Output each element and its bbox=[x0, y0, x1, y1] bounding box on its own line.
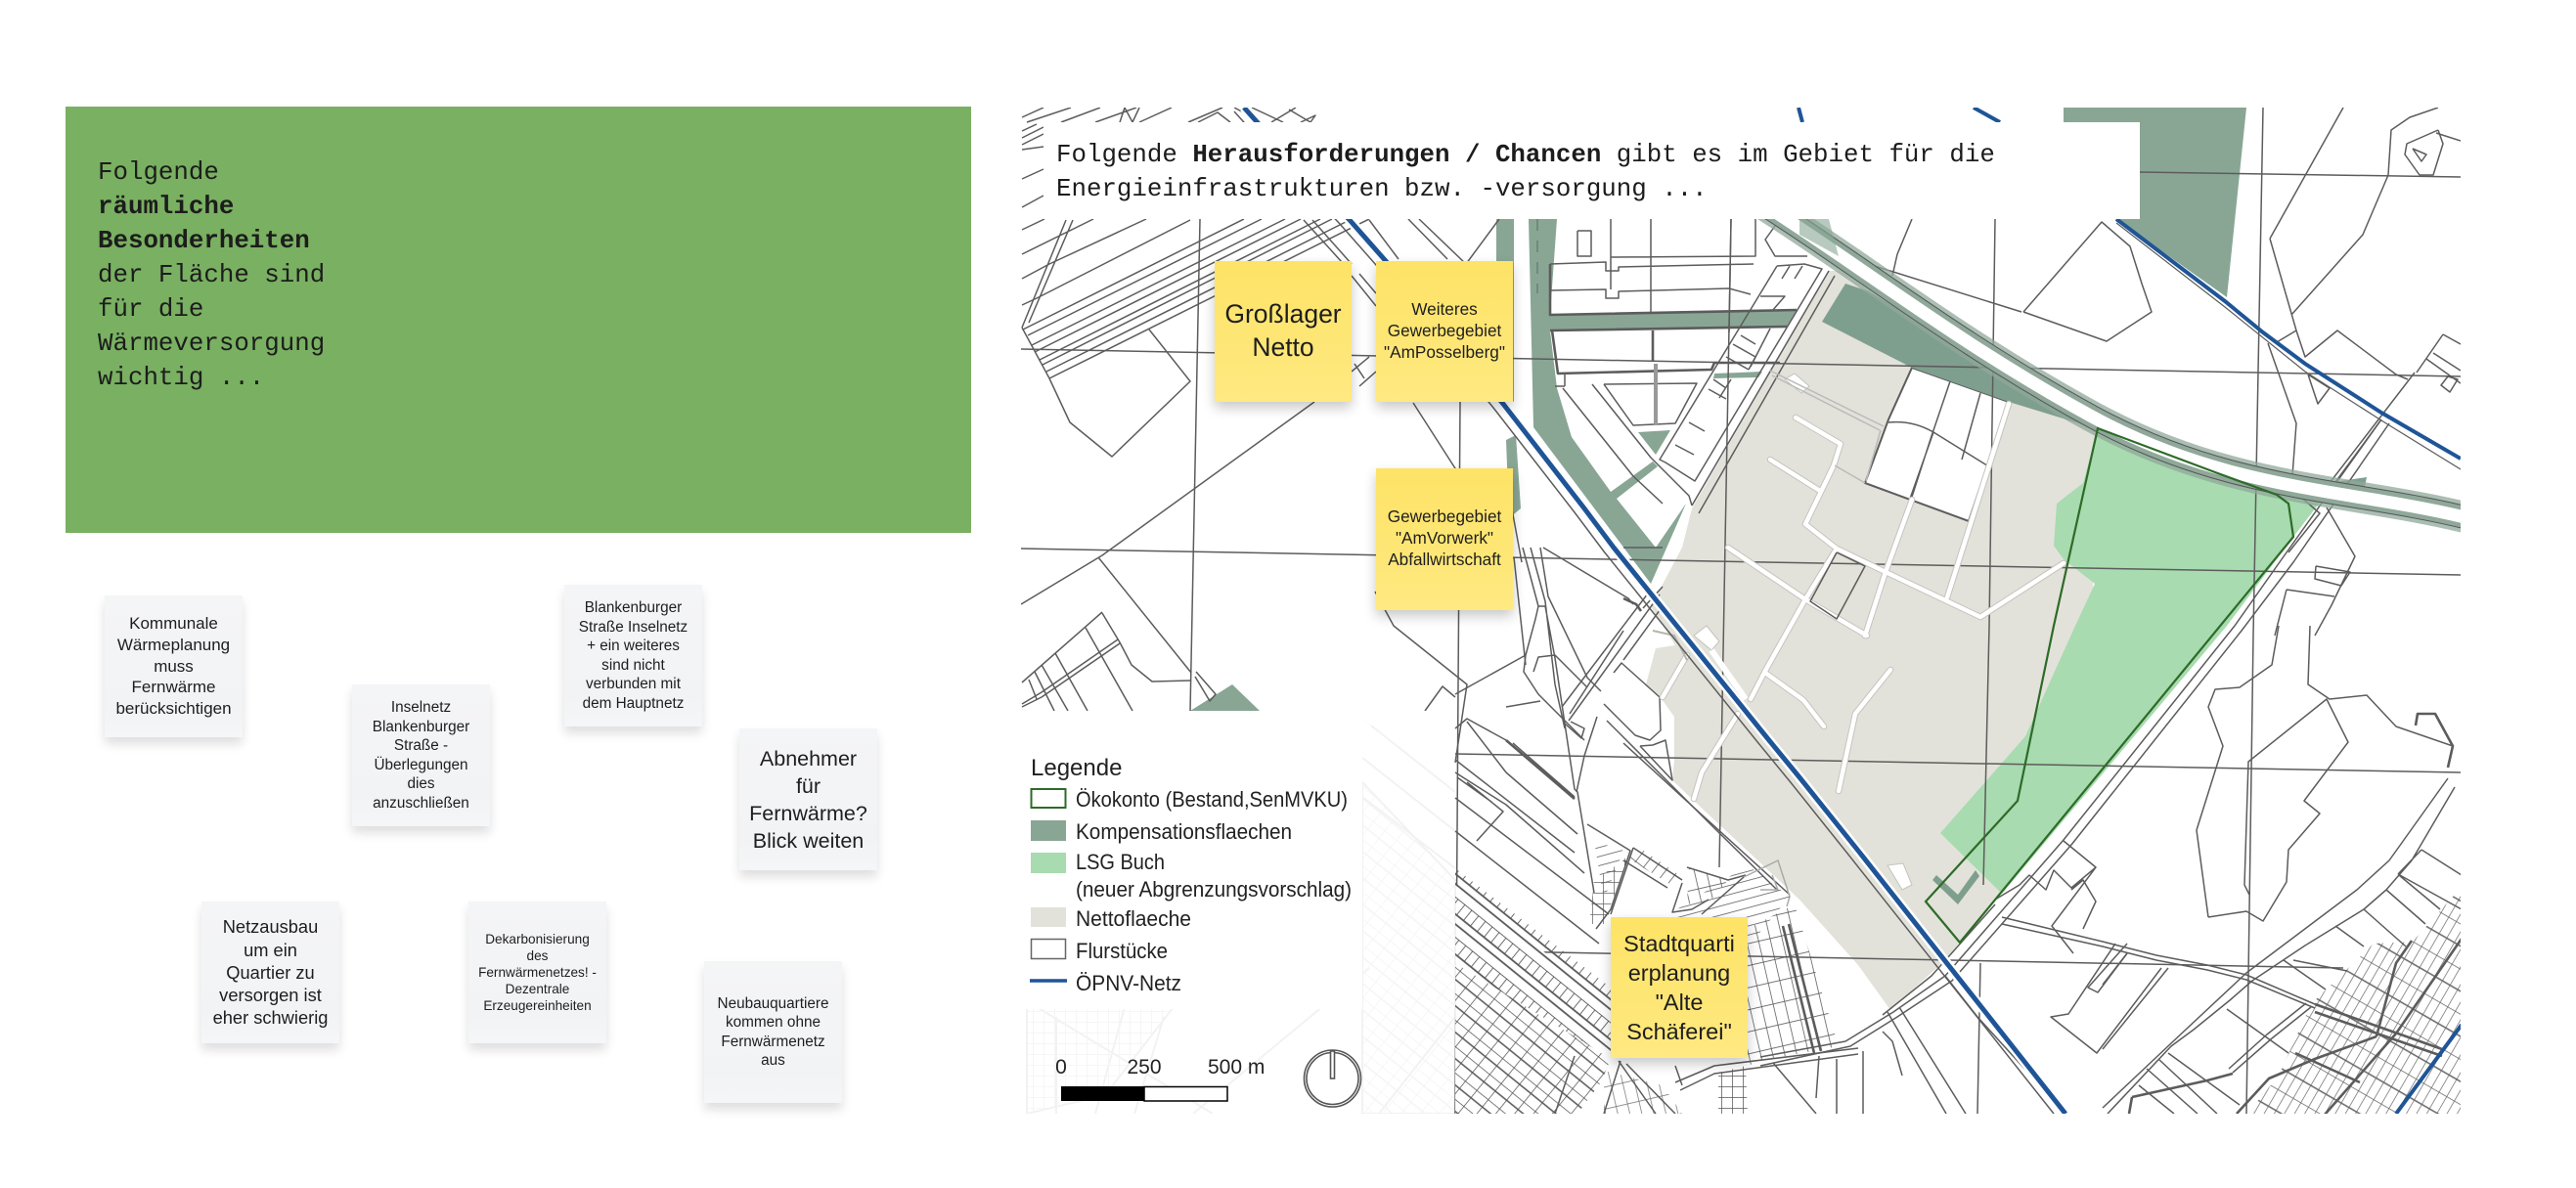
scale bar: 0 bbox=[1055, 1056, 1067, 1078]
note card: Kommunale Wärmeplanung bbox=[105, 595, 243, 737]
sticky note: Stadtquartierplanung: Stadtquarti bbox=[1623, 931, 1735, 956]
sticky note: Großlager Netto bbox=[1215, 261, 1352, 402]
panel heading text: Wärmeversorgung bbox=[98, 330, 325, 358]
map: Kompensationsflaechen bbox=[1191, 108, 2367, 904]
panel heading text: für die bbox=[98, 295, 203, 324]
map panel bbox=[1021, 108, 2461, 1114]
note card: Inselnetz Blankenburger Straße: Überlegungen bbox=[374, 757, 468, 772]
sticky note: Stadtquartierplanung: erplanung bbox=[1628, 960, 1730, 986]
note card: Dekarbonisierung: Dezentrale bbox=[506, 982, 569, 996]
note card: Inselnetz Blankenburger Straße: Inselnetz bbox=[391, 699, 451, 716]
note card: Dekarbonisierung: Fernwärmenetzes! - bbox=[478, 965, 597, 980]
sticky note: Gewerbegebiet AmVorwerk: Gewerbegebiet bbox=[1388, 506, 1501, 526]
panel heading text: räumliche bbox=[98, 193, 234, 221]
scale bar bbox=[1055, 1056, 1265, 1101]
note card: Kommunale Wärmeplanung: muss bbox=[154, 657, 194, 676]
map: Ökokonto outline bbox=[1926, 428, 2293, 943]
map title text: Folgende Herausforderungen / Chancen gibt es im Gebiet für die bbox=[1056, 141, 1995, 169]
panel heading text: wichtig ... bbox=[98, 364, 264, 392]
map title box bbox=[1044, 122, 2140, 219]
sticky note: Weiteres Gewerbegebiet: Gewerbegebiet bbox=[1388, 321, 1501, 340]
note card: Blankenburger Straße Inselnetz: dem Hauptnetz bbox=[583, 694, 684, 712]
map: white road network bbox=[1653, 371, 2064, 890]
scale bar: 250 bbox=[1127, 1056, 1162, 1078]
note card: Dekarbonisierung: Erzeugereinheiten bbox=[483, 998, 592, 1013]
note card: Abnehmer für Fernwärme: Abnehmer bbox=[760, 747, 857, 770]
map: Nettoflaeche area bbox=[1646, 271, 2098, 1010]
note card: Neubauquartiere: kommen ohne bbox=[726, 1014, 821, 1031]
note card: Blankenburger Straße Inselnetz: Straße Inselnetz bbox=[579, 618, 688, 636]
note card: Kommunale Wärmeplanung: Fernwärme bbox=[132, 678, 215, 696]
map title text: Energieinfrastrukturen bzw. -versorgung ... bbox=[1056, 175, 1708, 203]
sticky note: Weiteres Gewerbegebiet bbox=[1376, 261, 1513, 402]
legend item: Nettoflaeche: Nettoflaeche bbox=[1076, 906, 1191, 931]
note card: Blankenburger Straße Inselnetz: sind nicht bbox=[601, 657, 665, 673]
note card: Kommunale Wärmeplanung: berücksichtigen bbox=[115, 699, 232, 718]
sticky note: Weiteres Gewerbegebiet: "AmPosselberg" bbox=[1384, 342, 1505, 362]
legend heading: Legende bbox=[1031, 755, 1122, 781]
legend item: LSG Buch bbox=[1031, 850, 1352, 902]
sticky note: Stadtquartierplanung: Schäferei" bbox=[1626, 1019, 1732, 1044]
note card: Netzausbau: eher schwierig bbox=[213, 1007, 328, 1028]
sticky note: Großlager Netto: Großlager bbox=[1224, 299, 1342, 329]
scale bar: 500 m bbox=[1208, 1056, 1265, 1078]
sticky note: Gewerbegebiet AmVorwerk bbox=[1376, 468, 1513, 610]
note card: Inselnetz Blankenburger Straße: dies bbox=[407, 775, 435, 792]
map: north-east parcels bbox=[1865, 108, 2461, 636]
panel heading text: Folgende bbox=[98, 158, 219, 187]
legend bbox=[1021, 726, 1362, 1107]
sticky note: Gewerbegebiet AmVorwerk: Abfallwirtschaft bbox=[1388, 550, 1501, 569]
note card: Inselnetz Blankenburger Straße: Blankenburger bbox=[373, 718, 469, 735]
note card: Netzausbau: um ein bbox=[244, 940, 297, 960]
map: rail corridor bbox=[1760, 202, 2465, 517]
note card: Blankenburger Straße Inselnetz: Blankenburger bbox=[585, 599, 682, 616]
note card: Blankenburger Straße Inselnetz: + ein weiteres bbox=[587, 638, 680, 654]
note card: Blankenburger Straße Inselnetz bbox=[564, 585, 702, 726]
note card: Neubauquartiere bbox=[704, 961, 842, 1103]
map: Flurstücke white block bbox=[1865, 368, 2009, 521]
legend item: Nettoflaeche bbox=[1031, 906, 1191, 931]
map: dense parcels bbox=[1455, 841, 2462, 1115]
map: interchange and road parcels bbox=[1455, 548, 1790, 944]
legend item: LSG Buch: LSG Buch bbox=[1076, 850, 1165, 874]
note card: Abnehmer für Fernwärme: Blick weiten bbox=[753, 829, 864, 853]
sticky note: Großlager Netto: Netto bbox=[1252, 332, 1314, 362]
note card: Kommunale Wärmeplanung: Wärmeplanung bbox=[117, 636, 230, 654]
note card: Abnehmer für Fernwärme: Fernwärme? bbox=[749, 802, 867, 825]
map: LSG Buch area bbox=[1940, 428, 2323, 894]
icon: north arrow bbox=[1305, 1050, 1361, 1107]
note card: Neubauquartiere: Neubauquartiere bbox=[718, 995, 828, 1011]
sticky note: Gewerbegebiet AmVorwerk: "AmVorwerk" bbox=[1396, 528, 1493, 548]
note card: Netzausbau bbox=[201, 902, 339, 1043]
legend item: Flurstücke: Flurstücke bbox=[1076, 939, 1168, 963]
sticky note: Stadtquartierplanung bbox=[1611, 917, 1748, 1058]
note card: Netzausbau: Quartier zu bbox=[226, 962, 315, 983]
note card: Kommunale Wärmeplanung: Kommunale bbox=[129, 614, 218, 633]
note card: Dekarbonisierung bbox=[468, 902, 606, 1043]
note card: Abnehmer für Fernwärme: für bbox=[796, 774, 821, 798]
map: upper industrial parcels bbox=[1550, 217, 1835, 513]
panel heading text bbox=[98, 158, 325, 392]
map: south-east parcels bbox=[1760, 419, 2462, 1115]
legend backdrop bbox=[1021, 711, 1455, 1114]
note card: Dekarbonisierung: Dekarbonisierung bbox=[485, 932, 590, 946]
legend item: ÖPNV-Netz: ÖPNV-Netz bbox=[1076, 971, 1181, 995]
note card: Abnehmer für Fernwärme bbox=[739, 728, 877, 870]
panel heading text: der Fläche sind bbox=[98, 261, 325, 289]
panel heading text: Besonderheiten bbox=[98, 227, 310, 255]
sticky note: Stadtquartierplanung: "Alte bbox=[1656, 990, 1703, 1015]
note card: Netzausbau: Netzausbau bbox=[223, 916, 318, 937]
note card: Dekarbonisierung: des bbox=[527, 948, 548, 963]
sticky note: Weiteres Gewerbegebiet: Weiteres bbox=[1411, 299, 1478, 319]
note card: Neubauquartiere: Fernwärmenetz bbox=[721, 1033, 825, 1050]
legend item: Flurstücke bbox=[1031, 939, 1168, 963]
note card: Neubauquartiere: aus bbox=[761, 1052, 785, 1069]
note card: Blankenburger Straße Inselnetz: verbunden mit bbox=[586, 676, 681, 692]
legend item: Ökokonto: Ökokonto (Bestand,SenMVKU) bbox=[1076, 787, 1348, 812]
map: ÖPNV lines bbox=[1234, 108, 2462, 1114]
map: top-left parallel parcels bbox=[1022, 108, 1447, 457]
map: long parcel lines bbox=[1021, 108, 2461, 1114]
map title text bbox=[1056, 141, 1995, 203]
note card: Inselnetz Blankenburger Straße: Straße - bbox=[394, 737, 448, 754]
legend item: Kompensationsflaechen: Kompensationsflaechen bbox=[1076, 819, 1292, 844]
note card: Inselnetz Blankenburger Straße bbox=[352, 684, 490, 826]
green panel: räumliche Besonderheiten bbox=[66, 107, 971, 533]
legend item: LSG Buch: (neuer Abgrenzungsvorschlag) bbox=[1076, 877, 1352, 902]
note card: Netzausbau: versorgen ist bbox=[219, 985, 322, 1005]
note card: Inselnetz Blankenburger Straße: anzuschließen bbox=[373, 794, 469, 812]
